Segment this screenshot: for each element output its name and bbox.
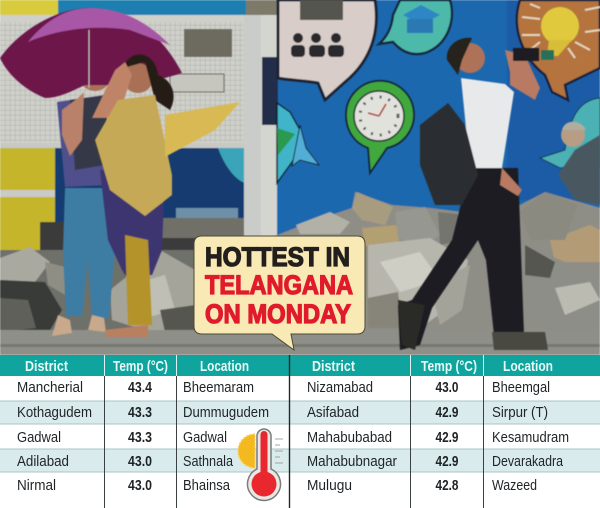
mural: people speech bubble: [278, 0, 376, 100]
table header labels: Temp (°C): [421, 358, 477, 375]
photo: woman in yellow saree: [92, 54, 240, 337]
table left block: Mancherial: [17, 379, 83, 396]
table right block: Nizamabad: [307, 379, 373, 396]
table: hottest districts: [0, 355, 600, 508]
rubble and rocks: [0, 192, 600, 335]
mural: graduation cap bubble: [379, 0, 452, 54]
table right block: 43.0: [436, 379, 458, 396]
photo: seated old man: [558, 122, 600, 205]
icon: sun and thermometer: [238, 429, 283, 500]
table left block: Bheemaram: [183, 379, 254, 396]
table left block: 43.4: [128, 379, 153, 396]
table left block: 43.3: [128, 429, 152, 446]
table right block: 42.9: [436, 404, 458, 421]
photo: umbrella: [0, 8, 182, 98]
callout line 3: ON MONDAY: [205, 299, 351, 329]
table left block: 43.3: [128, 404, 152, 421]
table header band: [0, 355, 600, 376]
table left block: 43.0: [128, 477, 152, 494]
callout: hottest in Telangana on Monday: [194, 236, 365, 350]
table right block: 42.8: [436, 477, 458, 494]
callout line 2: TELANGANA: [205, 270, 353, 300]
icon: thermometer: [248, 429, 283, 500]
table right block: Kesamudram: [492, 429, 569, 446]
icon: sun: [238, 434, 255, 468]
table left block: Gadwal: [17, 429, 61, 446]
table right block: [307, 379, 569, 494]
table right block: Mahabubabad: [307, 429, 392, 446]
table header labels: District: [312, 358, 355, 375]
road: [0, 330, 600, 355]
table right block: Devarakadra: [492, 453, 564, 470]
table left block: Kothagudem: [17, 404, 92, 421]
table left block: Gadwal: [183, 429, 227, 446]
photo: street scene background: [0, 0, 600, 355]
painted wall: [0, 0, 600, 355]
table header labels: Location: [503, 358, 553, 375]
callout line 1: HOTTEST IN: [205, 242, 350, 272]
bus shelter panel: [0, 15, 246, 255]
table right block: Sirpur (T): [492, 404, 548, 421]
photo: man drinking from bottle: [398, 38, 548, 350]
table right block: Wazeed: [492, 477, 537, 494]
table right block: 42.9: [436, 453, 458, 470]
table right block: Mulugu: [307, 477, 352, 494]
photo: woman with jeans and striped top: [52, 56, 115, 336]
table header labels: Temp (°C): [113, 358, 168, 375]
table right block: Mahabubnagar: [307, 453, 397, 470]
table left block: [17, 379, 269, 494]
table rows background: [0, 376, 600, 508]
table left block: Nirmal: [17, 477, 56, 494]
table left block: Sathnala: [183, 453, 234, 470]
shelter pillars: [244, 0, 278, 240]
table header labels: Location: [200, 358, 249, 375]
table column rules: [104, 355, 484, 508]
mural: light bulb bubble: [517, 0, 600, 100]
table header labels: [25, 358, 553, 375]
mural: clock bubble: [346, 81, 414, 173]
table left block: 43.0: [128, 453, 152, 470]
table left block: Adilabad: [17, 453, 69, 470]
table right block: Bheemgal: [492, 379, 550, 396]
table left block: Dummugudem: [183, 404, 269, 421]
table right block: 42.9: [436, 429, 458, 446]
table header labels: District: [25, 358, 68, 375]
table left block: Bhainsa: [183, 477, 231, 494]
mural: fish and teal shapes: [277, 98, 600, 183]
table right block: Asifabad: [307, 404, 359, 421]
